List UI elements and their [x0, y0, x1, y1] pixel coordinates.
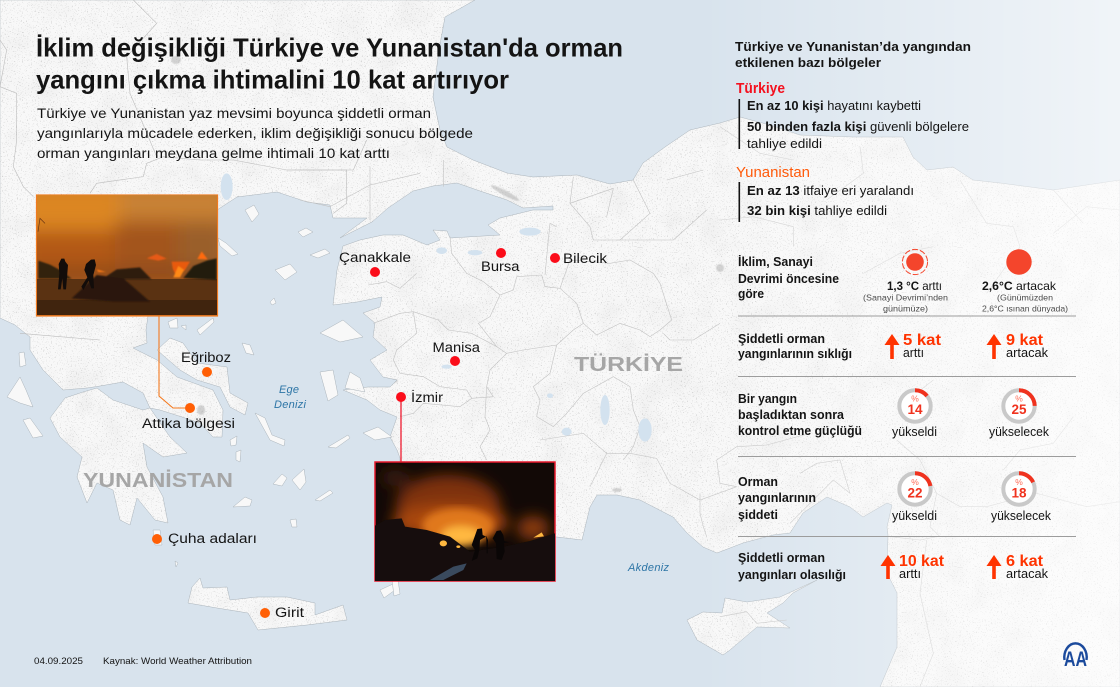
row: temperature: (Sanayi Devrimi’nden: [863, 292, 948, 302]
country label: Türkiye: TÜRKİYE: [574, 353, 683, 376]
location: Çanakkale: Çanakkale: [339, 250, 411, 265]
row: frequency: arttı: [903, 346, 924, 360]
section: Türkiye: [736, 81, 969, 151]
donut: 22 percent: 22: [907, 486, 923, 500]
row: control difficulty: kontrol etme güçlüğü: [738, 424, 862, 438]
row: temperature: 2,6°C ısınan dünyada): [982, 304, 1068, 314]
comparison table: [738, 249, 1076, 582]
row: severity: şiddeti: [738, 508, 778, 522]
land: Aegean and Ionian islands: [7, 205, 400, 598]
row: temperature: İklim, Sanayi: [738, 254, 813, 269]
donut: 14 percent: %: [911, 394, 919, 404]
row: control difficulty: yükseldi: [892, 425, 937, 439]
location: Girit: Girit: [275, 605, 304, 620]
row: temperature: 2,6°C artacak: [982, 279, 1057, 293]
arrow up: [880, 555, 896, 579]
sea label: Ege Denizi: Ege: [279, 384, 299, 396]
row: temperature: [738, 249, 1068, 314]
location: İzmir: [396, 390, 444, 405]
location: Bilecik: Bilecik: [563, 251, 607, 266]
donut: 18 percent: 18: [1011, 486, 1027, 500]
location: Bilecik: [550, 251, 607, 266]
row: temperature: (Günümüzden: [997, 292, 1053, 302]
land: Evia: [157, 338, 248, 415]
row: probability: yangınları olasılığı: [738, 568, 846, 582]
row: probability: 6 kat: [1006, 553, 1044, 570]
row: severity: yükselecek: [991, 509, 1052, 523]
texture: urban areas: [171, 56, 724, 492]
donut: 25 percent: 25: [1011, 402, 1027, 417]
row: severity: Orman: [738, 475, 778, 489]
row: probability: artacak: [1006, 567, 1049, 581]
donut: 25 percent: %: [1015, 394, 1023, 404]
location: Çuha adaları: Çuha adaları: [168, 531, 257, 546]
logo: Anadolu Agency: [1064, 643, 1087, 671]
footer: date and source: 04.09.2025: [34, 656, 83, 667]
location: Attika bölgesi: [142, 403, 235, 431]
arrow up: [986, 334, 1002, 359]
location: İzmir: İzmir: [411, 390, 444, 405]
panel: affected regions: [735, 39, 971, 222]
intro paragraph: orman yangınları meydana gelme ihtimali 10 kat arttı: [37, 145, 390, 161]
map: lakes: [221, 173, 652, 442]
section: Yunanistan: [736, 164, 914, 222]
flames: [97, 251, 208, 277]
row: frequency: 5 kat: [903, 332, 942, 349]
row: temperature: günümüze): [883, 304, 928, 314]
footer: date and source: [34, 656, 252, 667]
row: frequency: 9 kat: [1006, 332, 1044, 349]
sea label: Ege Denizi: Denizi: [274, 399, 307, 411]
arrow up: [884, 334, 900, 359]
map: borders of northern Anatolia: [720, 127, 1120, 293]
panel heading: etkilenen bazı bölgeler: [735, 55, 881, 70]
land: Cyprus: [687, 580, 817, 655]
row: control difficulty: başladıktan sonra: [738, 408, 845, 422]
title: İklim değişikliği Türkiye ve Yunanistan'da orman: [36, 32, 623, 62]
section: Yunanistan: 32 bin kişi tahliye edildi: [747, 203, 887, 218]
intro paragraph: Türkiye ve Yunanistan yaz mevsimi boyunca şiddetli orman: [37, 105, 431, 121]
arrow up: [986, 555, 1002, 579]
location: Girit: [260, 605, 304, 620]
map: province and national borders: [300, 160, 720, 460]
icon: 1.3 degree circle: [902, 249, 928, 275]
map: borders of eastern Anatolia and Syria: [890, 380, 1120, 687]
photo: firefighters in Türkiye wildfire at night: [375, 462, 555, 582]
map: borders of southern Anatolia: [540, 433, 850, 623]
land: Peloponnese: [50, 388, 187, 525]
section: Türkiye: En az 10 kişi hayatını kaybetti: [747, 98, 921, 113]
donut: 14 percent: 14: [907, 402, 923, 417]
donut: 18 percent: %: [1015, 477, 1023, 487]
panel heading: [735, 39, 971, 70]
map labels: Türkiye locations: [339, 248, 607, 405]
row: frequency: yangınlarının sıklığı: [738, 347, 852, 361]
row: severity: yangınlarının: [738, 491, 816, 505]
row: control difficulty: Bir yangın: [738, 392, 797, 406]
section: Türkiye: 50 binden fazla kişi güvenli bölgelere: [747, 119, 969, 134]
location: Manisa: [432, 340, 481, 366]
row: control difficulty: [738, 390, 1050, 439]
section: Yunanistan: Yunanistan: [736, 164, 810, 181]
intro paragraph: yangınlarıyla mücadele ederken, iklim değişikliği sonucu bölgede: [37, 125, 473, 141]
photo: firefighters in Greece wildfire: [36, 194, 218, 317]
location: Manisa: Manisa: [432, 340, 481, 355]
sea label: Akdeniz: Akdeniz: [627, 562, 670, 574]
location: Attika bölgesi: Attika bölgesi: [142, 416, 235, 431]
row: probability: Şiddetli orman: [738, 551, 825, 565]
intro paragraph: [37, 105, 473, 161]
fade of the map toward the right side: [700, 0, 1120, 687]
section: Türkiye: tahliye edildi: [747, 136, 822, 151]
footer: date and source: Kaynak: World Weather Attribution: [103, 656, 252, 667]
section: Yunanistan: En az 13 itfaiye eri yaralandı: [747, 183, 914, 198]
land: Crete: [188, 578, 347, 630]
row: temperature: göre: [738, 287, 764, 301]
connector: photo to İzmir: [400, 397, 402, 462]
row: frequency: artacak: [1006, 346, 1049, 360]
country label: Yunanistan: YUNANİSTAN: [83, 469, 233, 492]
map labels: Yunanistan locations: [142, 350, 304, 620]
section: Türkiye: Türkiye: [736, 81, 785, 97]
row: probability: [738, 551, 1049, 582]
sea label: Ege Denizi: [274, 384, 307, 411]
location: Bursa: Bursa: [481, 259, 520, 274]
icon: 2.6 degree circle: [1006, 249, 1032, 275]
row: severity: yükseldi: [892, 509, 937, 523]
map: borders of Thrace and northern Greece: [0, 0, 367, 340]
row: temperature: Devrimi öncesine: [738, 272, 839, 286]
row: frequency: Şiddetli orman: [738, 332, 825, 346]
logo: Anadolu Agency: AA: [1064, 648, 1087, 671]
location: Eğriboz: Eğriboz: [181, 350, 231, 365]
donut: 18 percent: [1003, 473, 1035, 505]
location: Eğriboz: [181, 350, 231, 377]
location: Çanakkale: [339, 250, 411, 277]
row: temperature: 1,3 °C arttı: [887, 279, 942, 293]
row: frequency: [738, 332, 1049, 361]
connector: photo to Attika: [159, 316, 190, 408]
donut: 14 percent: [899, 390, 931, 422]
row: probability: 10 kat: [899, 553, 945, 570]
row: severity: [738, 473, 1052, 523]
title: yangını çıkma ihtimalini 10 kat artırıyor: [36, 64, 509, 94]
location: Bursa: [481, 248, 520, 274]
donut: 25 percent: [1003, 390, 1035, 422]
panel heading: Türkiye ve Yunanistan’da yangından: [735, 39, 971, 54]
donut: 22 percent: [899, 473, 931, 505]
title: [36, 32, 623, 94]
donut: 22 percent: %: [911, 477, 919, 487]
row: probability: arttı: [899, 567, 921, 581]
silhouettes: [58, 259, 96, 290]
row: control difficulty: yükselecek: [989, 425, 1050, 439]
